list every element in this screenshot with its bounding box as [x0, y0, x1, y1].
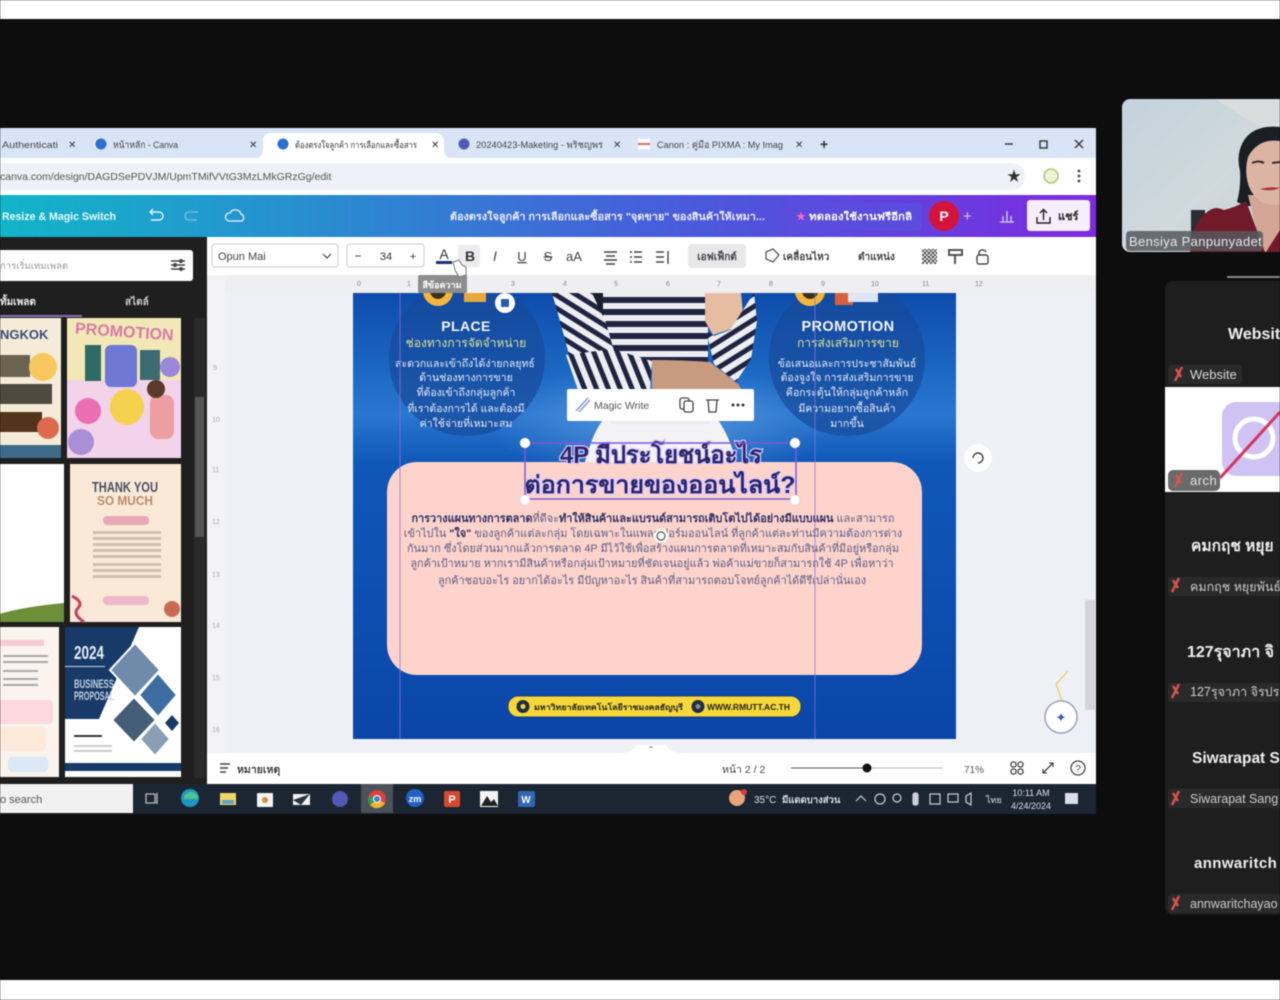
body paragraph: ลูกค้าชอบอะไร อยากได้อะไร มีปัญหาอะไร สินค้าที่สามารถตอบโจทย์ลูกค้าได้ดีรึเปล่านั่นเอง	[438, 573, 866, 587]
panel: promotion circle: PROMOTION	[801, 319, 895, 335]
panel: place circle: ที่ต้องเข้าถึงกลุ่มลูกค้า	[417, 385, 515, 399]
clock: 4/24/2024	[1011, 801, 1051, 811]
participant panel	[1165, 276, 1280, 915]
windows taskbar	[0, 784, 1096, 814]
magic assistant button	[1045, 671, 1077, 733]
zoom slider	[791, 764, 943, 772]
woman: neck and chest	[1248, 195, 1280, 252]
panel: promotion circle: ต้องจูงใจ การส่งเสริมการขาย	[781, 371, 913, 384]
clock: 10:11 AM	[1012, 788, 1050, 798]
search box: o search	[0, 794, 42, 806]
body paragraph: การวางแผนทางการตลาดที่ดีจะทำให้สินค้าและแบรนด์สามารถเติบโตไปได้อย่างมีแบบแผน และสามารถ	[411, 511, 895, 525]
font selector: Opun Mai	[218, 251, 266, 263]
text style icons: aA	[566, 249, 582, 264]
browser tab bar	[0, 128, 1096, 159]
left forearm	[566, 349, 652, 390]
panel: promotion circle: มากขึ้น	[830, 416, 864, 430]
panel: place circle: ด้านช่องทางการขาย	[419, 372, 513, 384]
rulers: 1	[407, 281, 411, 288]
Magic Write floating toolbar	[567, 389, 754, 421]
panel: promotion circle: มีความอยากซื้อสินค้า	[798, 401, 896, 415]
rulers: 13	[212, 572, 220, 579]
tile: annwaritchaya: annwaritchayao	[1190, 897, 1278, 911]
tile: arch with camera logo	[1165, 387, 1280, 492]
icon: text colour: A	[439, 246, 449, 262]
Magic Write floating toolbar: Magic Write	[594, 400, 649, 412]
tab: meeting: 20240423-Maketing - พริชญพร	[476, 140, 603, 151]
thumbnail: 2024 business proposal: BUSINESS	[74, 677, 114, 691]
magic assistant button: ✦	[1056, 710, 1067, 725]
page indicator: หน้า 2 / 2	[722, 764, 766, 776]
icon: trash	[706, 400, 719, 412]
tile: Khomkrit: คมกฤช หยุยพันธ์	[1190, 580, 1280, 595]
panel: place circle: PLACE	[441, 318, 491, 334]
avatar: P: +	[963, 208, 972, 225]
rulers: 0	[357, 281, 361, 288]
weather widget: มีแดดบางส่วน	[782, 794, 841, 806]
new tab button: +	[820, 136, 828, 152]
rulers: 12	[975, 281, 983, 288]
thumbnail: schedule	[0, 627, 59, 777]
rulers: 7	[717, 281, 721, 288]
text style icons: U	[517, 249, 527, 264]
search box	[0, 784, 133, 813]
tab: active design: ต้องตรงใจลูกค้า การเลือกและซื้อสาร	[295, 138, 417, 151]
icon: cloud saved	[225, 210, 244, 221]
sidebar scrollbar	[194, 318, 205, 778]
tile: 127 Ruchapa	[1168, 643, 1280, 702]
thumbnail: white nature	[0, 464, 64, 622]
icons: grid, expand, help	[1011, 761, 1085, 775]
icon: menu dots	[1078, 170, 1080, 182]
font size stepper	[347, 244, 424, 267]
tooltip: text colour	[418, 275, 467, 293]
tab: authentication	[2, 140, 76, 151]
thumbnail: 2024 business proposal: PROPOSAL	[74, 689, 114, 703]
panel: promotion circle: ข้อเสนอและการประชาสัมพันธ์	[778, 357, 916, 370]
canva bottom bar: ?	[1075, 764, 1081, 775]
thumbnail: Thank you so much	[70, 464, 181, 622]
thumbnail: Bangkok: NGKOK	[0, 327, 49, 342]
notes button	[220, 764, 280, 777]
torso stripes	[600, 293, 708, 365]
panel: promotion circle: การส่งเสริมการขาย	[797, 336, 899, 350]
clock	[1011, 788, 1051, 811]
canvas workspace	[207, 275, 1096, 753]
bold button: B	[465, 248, 475, 264]
floating refresh button	[964, 444, 992, 472]
thumbnail: Bangkok	[0, 318, 61, 458]
icon: undo redo	[150, 209, 198, 220]
bare midriff	[652, 360, 742, 390]
canva bottom bar	[207, 745, 1096, 784]
tab: active design	[278, 138, 439, 151]
share button: แชร์	[1058, 210, 1079, 223]
icon: duplicate	[680, 398, 693, 412]
address bar	[0, 158, 1096, 195]
rulers: 15	[212, 675, 220, 682]
tab: authentication: Authenticati	[2, 140, 58, 151]
tile: annwaritchaya	[1168, 855, 1280, 913]
avatar: P: P	[939, 208, 949, 224]
icon: text colour	[436, 246, 452, 264]
tile: Siwarapat	[1168, 750, 1280, 808]
photo: woman in striped top	[552, 293, 757, 470]
body paragraph: ลูกค้าเป้าหมาย หากเรามีสินค้าหรือกลุ่มเป้าหมายที่ชัดเจนอยู่แล้ว พ่อค้าแม่ขายก็สามารถใช้ 4P เพื่อหาว่า	[410, 556, 894, 570]
rulers: 8	[769, 281, 773, 288]
rulers: 4	[563, 281, 567, 288]
presenter video: Bensiya	[1122, 99, 1280, 252]
notes button: หมายเหตุ	[237, 764, 280, 777]
tile: Website	[1168, 326, 1280, 384]
left sidebar panel	[0, 237, 216, 785]
tile: Website: Websit	[1228, 326, 1280, 343]
sidebar tabs	[0, 294, 149, 317]
system tray icons	[856, 793, 971, 805]
thumbnail: Promotion	[67, 318, 181, 458]
woman: mouth	[1260, 187, 1280, 190]
icon: number 3 badge	[422, 292, 454, 307]
rulers: 6	[666, 281, 670, 288]
woman: face	[1246, 141, 1280, 205]
windows taskbar: ไทย	[985, 795, 1002, 805]
effects button: เอฟเฟ็กต์	[697, 249, 737, 263]
tile: Khomkrit	[1168, 538, 1280, 596]
footer pill: WWW.RMUTT.AC.TH	[707, 703, 790, 712]
font size stepper: 34	[380, 251, 392, 263]
tile: arch with camera logo: arch	[1190, 473, 1217, 488]
thumbnail: Promotion: PROMOTION	[75, 321, 174, 344]
selection guides and handles	[400, 293, 815, 739]
raised hand	[705, 293, 743, 335]
right sleeve	[706, 293, 757, 382]
bold button	[458, 245, 480, 267]
font size stepper: −	[354, 249, 362, 263]
icon: more	[732, 404, 744, 406]
woman: red dress	[1190, 201, 1280, 252]
tile: Khomkrit: คมกฤช หยุย	[1191, 538, 1274, 556]
text toolbar	[207, 237, 1096, 275]
body paragraph: กันมาก ซึ่งโดยส่วนมากแล้วการตลาด 4P มีไว้ใช้เพื่อสร้างแผนการตลาดที่เหมาะสมกับสินค้าที่มีอยู่หรือกลุ่ม	[407, 541, 899, 555]
canva bottom bar: 71%	[964, 765, 984, 776]
Canva header bar	[0, 195, 1096, 238]
icon: extension	[1044, 169, 1058, 183]
panel: place circle: ค่าใช้จ่ายที่เหมาะสม	[420, 416, 512, 430]
heading: 4P benefits: 4P มีประโยชน์อะไร	[560, 440, 762, 469]
rulers: 10	[212, 417, 220, 424]
trial button: ★	[796, 212, 806, 223]
template search box	[0, 250, 193, 281]
rulers: 3	[511, 281, 515, 288]
tile: Siwarapat: Siwarapat S	[1192, 750, 1280, 767]
name label: Bensiya Panpunyadet	[1129, 234, 1262, 249]
tab: authentication: ✕	[68, 140, 76, 151]
avatar: P	[929, 201, 972, 231]
sidebar tabs: ทั้มเพลต	[0, 294, 36, 308]
body paragraph	[404, 511, 902, 587]
animate button: เคลื่อนไหว	[783, 249, 830, 263]
app icons: P	[448, 794, 456, 806]
address bar: canva.com/design/DAGDSePDVJM/UpmTMifVVtG3MzLMkGRzGg/edit	[0, 171, 332, 183]
rulers: 10	[871, 281, 879, 288]
thumbnail: Thank you so much: SO MUCH	[97, 493, 153, 508]
rulers: 9	[213, 365, 217, 372]
tile: Website: Website	[1190, 367, 1237, 382]
workspace scrollbar	[1085, 600, 1095, 710]
panel: place circle: ช่องทางการจัดจำหน่าย	[406, 336, 526, 350]
rulers: 5	[614, 281, 618, 288]
position button: ตำแหน่ง	[858, 251, 895, 263]
icon: magic pen	[576, 398, 590, 412]
trial button: ทดลองใช้งานฟรีอีกลิ	[809, 210, 912, 223]
effects button	[688, 244, 746, 268]
rulers: 14	[212, 623, 220, 630]
app icons: zm	[409, 794, 421, 804]
icon: analytics	[1000, 211, 1014, 222]
notification icon	[1065, 793, 1078, 804]
tab: Canva home	[96, 138, 257, 151]
icon: rotate handle	[654, 529, 668, 543]
alignment icons	[604, 251, 668, 264]
body paragraph: เข้าไปใน "ใจ" ของลูกค้าแต่ละกลุ่ม โดยเฉพาะในแพลตฟอร์มออนไลน์ ที่ลูกค้าแต่ละท่านมีความต้องการต่าง	[404, 526, 902, 540]
font size stepper: +	[410, 251, 416, 263]
white trousers	[584, 420, 736, 463]
trial button	[784, 203, 922, 231]
rulers: 11	[212, 467, 219, 474]
sidebar collapse handle	[207, 483, 216, 539]
woman: eyes	[1252, 162, 1280, 163]
thumbnail: 2024 business proposal: 2024	[74, 643, 104, 663]
rulers	[207, 275, 1096, 753]
Canva header bar: Resize & Magic Switch	[2, 211, 116, 223]
panel: place circle: ที่เราต้องการได้ และต้องมี	[407, 401, 525, 415]
heading: 4P benefits: ต่อการขายของออนไลน์?	[524, 470, 796, 499]
tile: 127 Ruchapa: 127รุจาภา จิรปร	[1190, 685, 1280, 700]
icon: task view	[146, 793, 157, 804]
tab: meeting: ✕	[613, 140, 621, 151]
footer pill: มหาวิทยาลัยเทคโนโลยีราชมงคลธัญบุรี	[534, 702, 684, 713]
font selector	[212, 244, 338, 267]
panel: pink content box	[387, 462, 922, 675]
template search box: การเริ่มเทมเพลต	[0, 259, 68, 272]
heading: 4P benefits	[524, 440, 796, 499]
rulers: 16	[212, 727, 220, 734]
tab: Canon: ✕	[795, 140, 803, 151]
document title: ต้องตรงใจลูกค้า การเลือกและซื้อสาร "จุดขาย" ของสินค้าให้เหมา...	[450, 209, 765, 224]
icon: bookmark star: ★	[1007, 168, 1021, 184]
tab: Canva home: หน้าหลัก - Canva	[113, 140, 179, 151]
tab: Canon: Canon : คู่มือ PIXMA : My Imag	[657, 140, 783, 151]
window controls	[1005, 140, 1083, 148]
tile: annwaritchaya: annwaritch	[1194, 855, 1277, 872]
rulers: 11	[922, 281, 929, 288]
panel: place circle	[389, 276, 545, 436]
share button	[1027, 200, 1090, 231]
sidebar tabs: สไตล์	[125, 295, 149, 308]
rulers: 12	[212, 519, 220, 526]
icon: number 4 badge	[794, 292, 826, 307]
canva bottom bar: ⌃	[648, 745, 654, 754]
icon: mouse cursor	[453, 260, 466, 277]
text style icons: S	[544, 249, 553, 264]
weather widget	[729, 789, 841, 806]
panel: promotion circle: คือกระตุ้นให้กลุ่มลูกค้าหลัก	[786, 386, 908, 399]
panel: place circle: สะดวกและเข้าถึงได้ง่ายกลยุทธ์	[395, 357, 535, 370]
footer pill	[508, 696, 801, 717]
icons: transparency, paint, lock	[922, 249, 988, 264]
weather widget: 35°C	[754, 795, 776, 806]
app icons: W	[521, 795, 531, 806]
rulers: 9	[821, 281, 825, 288]
text style icons: I	[493, 248, 497, 264]
left sleeve upper	[552, 293, 614, 363]
tab: Canva home: ✕	[249, 140, 257, 151]
tile: Siwarapat: Siwarapat Sang	[1190, 792, 1278, 806]
text style icons	[493, 248, 582, 264]
tile: 127 Ruchapa: 127รุจาภา จิ	[1187, 643, 1274, 662]
design page	[353, 276, 956, 739]
thumbnail: Thank you so much: THANK YOU	[92, 479, 158, 496]
panel: promotion circle	[769, 276, 925, 436]
tab: active design: ✕	[431, 140, 439, 151]
tooltip: text colour: สีข้อความ	[422, 280, 462, 290]
woman: hair	[1237, 127, 1280, 206]
app icons	[181, 784, 535, 813]
animate button	[766, 249, 830, 263]
thumbnail: 2024 business proposal	[65, 627, 181, 777]
